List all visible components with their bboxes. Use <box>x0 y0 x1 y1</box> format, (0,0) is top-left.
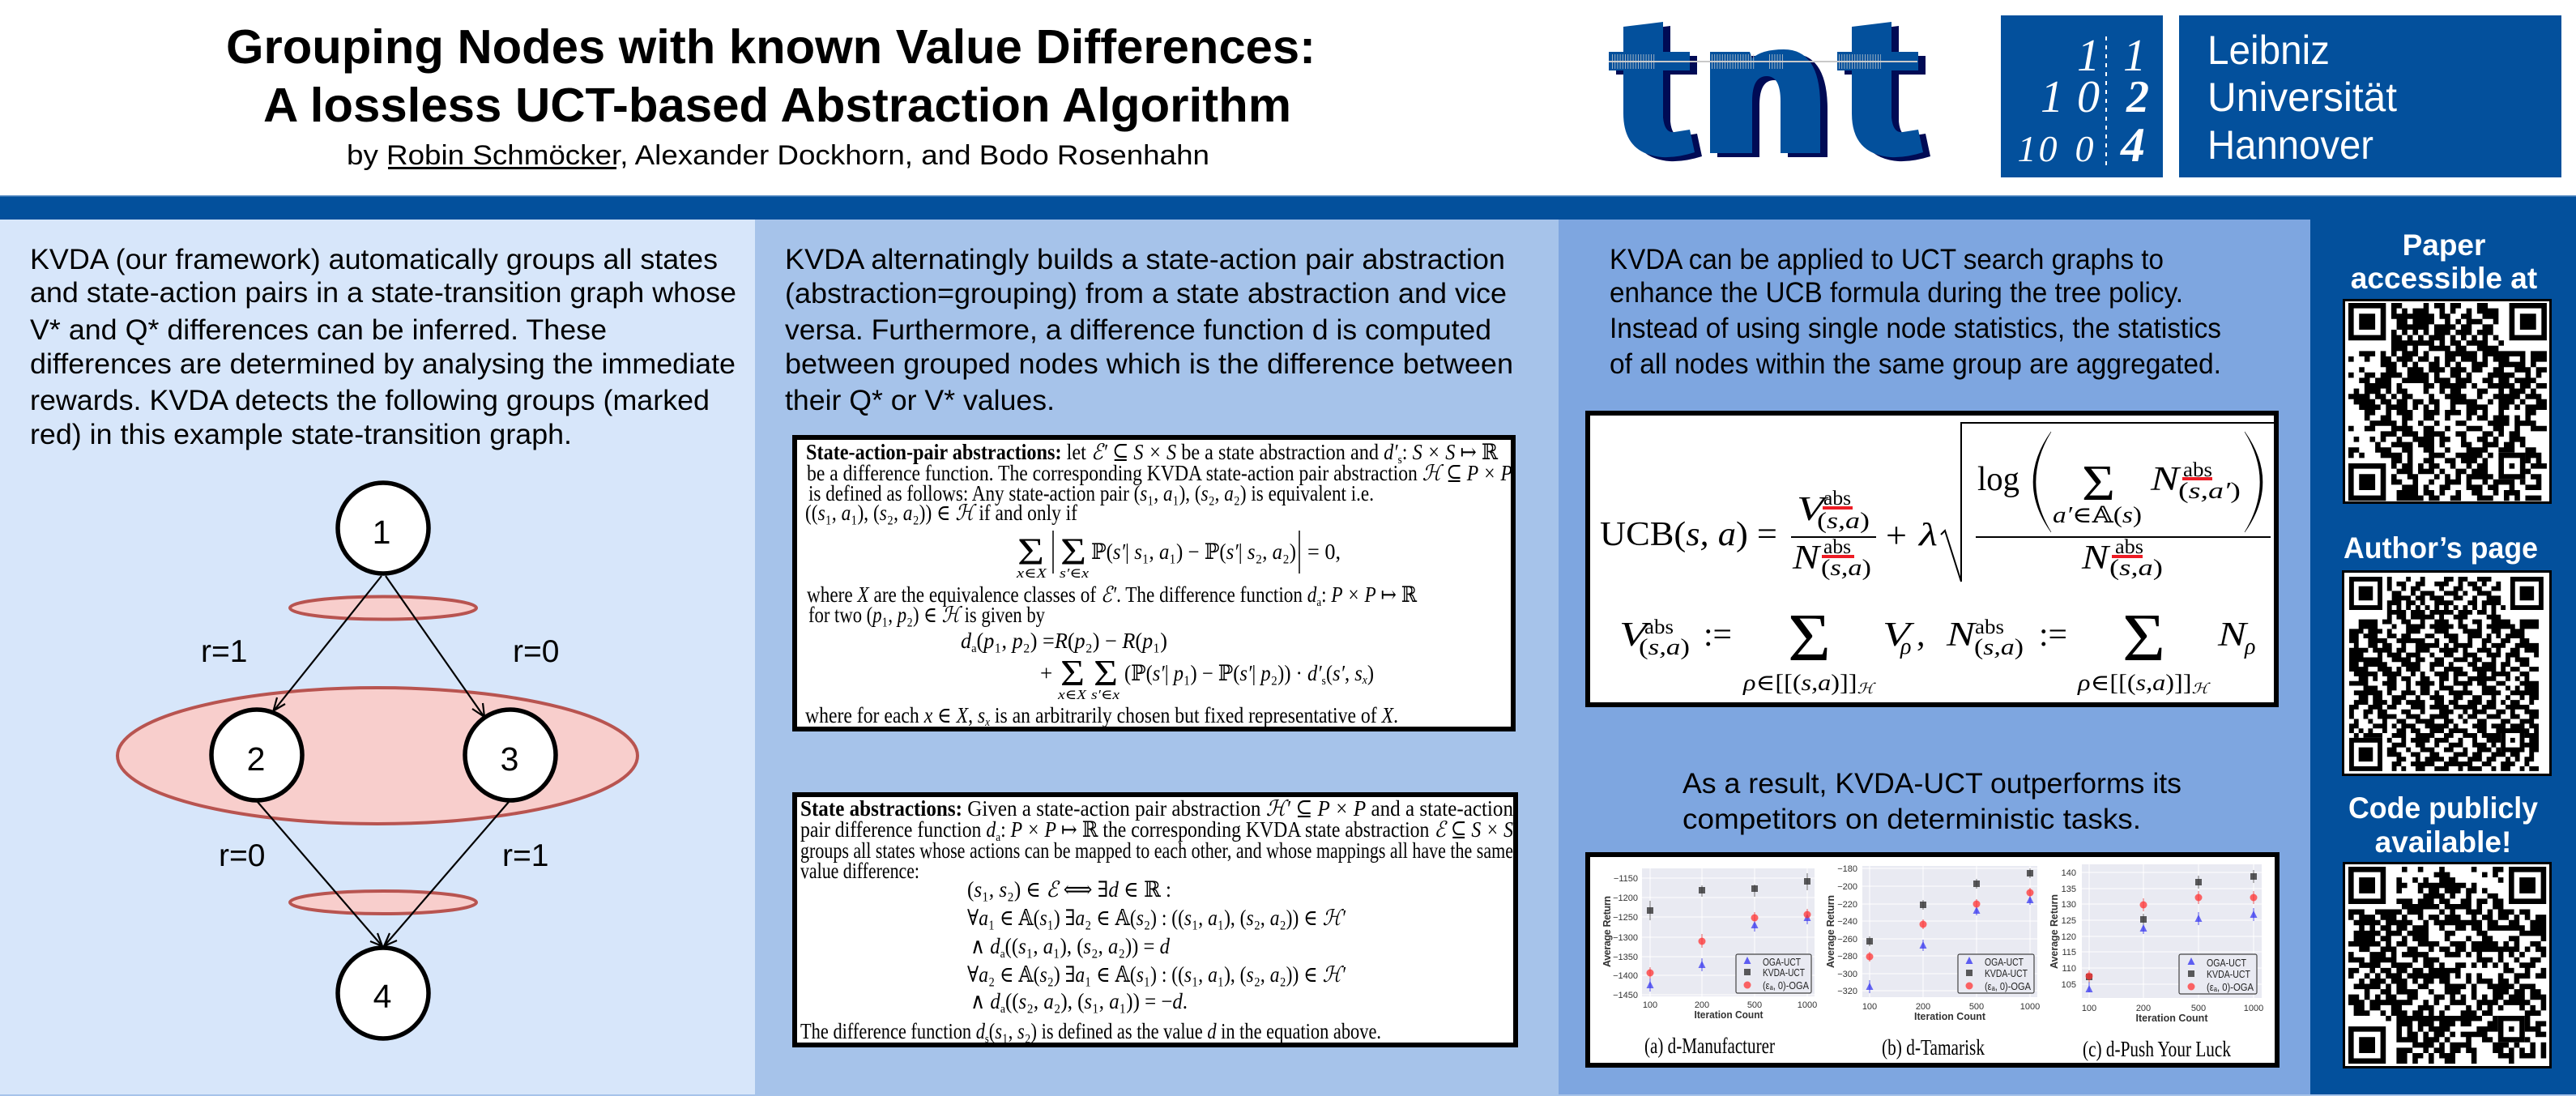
equation: difference function: (ℙ(s′| p₁) − ℙ(s′| p₂)) · d′ <box>1124 661 1323 685</box>
V abs definition: (s,a) <box>1639 634 1690 660</box>
QR code: author <box>2343 572 2550 774</box>
logo numerals: 4 <box>2120 118 2145 172</box>
edge labels: r=0 <box>219 838 265 873</box>
definition box: state abstractions: ( <box>989 1019 995 1043</box>
logo numerals: 0 <box>2077 72 2100 122</box>
chart: d-Manufacturer: 200 <box>1695 1000 1709 1010</box>
equation: difference function: ( <box>977 629 983 653</box>
denominator: abs <box>2115 536 2143 558</box>
square root <box>1941 423 2274 582</box>
chart: d-Tamarisk: Iteration Count <box>1914 1011 1986 1022</box>
UCB left side: UCB(s, a) = <box>1600 516 1777 553</box>
definition box: state abstractions: The difference function d <box>800 1019 1006 1043</box>
chart: d-Manufacturer: Iteration Count <box>1695 1009 1764 1021</box>
chart: d-Push Your Luck: 130 <box>2062 900 2076 910</box>
heading: code: Code publicly <box>2348 791 2538 825</box>
legend: OGA-UCT <box>1985 956 2024 968</box>
definition box: state abstractions: a <box>996 831 1000 844</box>
equation: equivalence condition: x∈X <box>1016 565 1047 581</box>
caption c: (c) d-Push Your Luck <box>2083 1037 2231 1061</box>
chart: d-Manufacturer: −1200 <box>1613 893 1638 903</box>
node labels: 4 <box>373 978 391 1015</box>
QR code: code <box>2344 864 2550 1068</box>
chart: d-Tamarisk: 1000 <box>2020 1002 2040 1012</box>
chart: d-Manufacturer: Average Return <box>1601 896 1613 967</box>
panel: KVDA intro and example graph <box>0 220 755 1094</box>
error bars and markers <box>1866 868 2033 993</box>
equation: difference function: Σ <box>1060 652 1085 693</box>
V abs definition: , <box>1917 616 1925 654</box>
definition box: state-action-pair abstractions: is an arbitrarily chosen but fixed representative of <box>990 703 1382 727</box>
definition box: state-action-pair abstractions: ((s₁, a₁), (s₂, a₂)) ∈ ℋ if and only if <box>805 501 1077 525</box>
chart: d-Push Your Luck: 110 <box>2062 964 2076 974</box>
V abs definition: ρ <box>1900 634 1911 659</box>
V abs definition: ρ∈[[( s,a)]] <box>1743 671 1853 696</box>
chart: d-Tamarisk: Average Return <box>1825 895 1836 968</box>
panel text <box>785 244 1513 416</box>
definition box: state-action-pair abstractions: S × S ↦ ℝ <box>1413 440 1503 464</box>
equation: state equivalence: (( <box>1005 934 1018 958</box>
results charts box <box>1588 855 2277 1065</box>
title <box>226 20 1316 132</box>
equation: equivalence condition <box>1016 531 1341 581</box>
equation: difference function: x∈X <box>1057 687 1087 702</box>
equation: difference function <box>961 629 1374 702</box>
definition box: state-action-pair abstractions <box>795 437 1513 729</box>
QR code: paper <box>2344 300 2550 502</box>
bottom edge stripe <box>0 1094 2576 1096</box>
chart: d-Push Your Luck: Iteration Count <box>2135 1013 2208 1024</box>
legend: OGA-UCT <box>2207 957 2246 969</box>
V abs definition: V <box>1619 616 1652 654</box>
chart: d-Tamarisk: −320 <box>1837 987 1857 996</box>
chart: d-Push Your Luck: 200 <box>2136 1004 2151 1013</box>
logo wordmark <box>2207 28 2397 168</box>
chart: d-Manufacturer: 1000 <box>1798 1000 1817 1010</box>
definition box: state abstractions: groups all states whose actions can be mapped to each other, and whose mappings all have the same <box>800 838 1513 863</box>
intro text: red) in this example state-transition graph. <box>30 419 572 450</box>
heading: code <box>2348 791 2538 859</box>
fraction V over N: N <box>1792 539 1821 577</box>
denominator <box>2081 536 2163 581</box>
error bars and markers <box>2085 870 2257 992</box>
intro text: KVDA (our framework) automatically groups all states <box>30 244 718 275</box>
denominator: N <box>2081 539 2110 577</box>
equation: difference function: s′∈x <box>1091 687 1120 702</box>
chart: d-Push Your Luck: Average Return <box>2049 894 2060 969</box>
chart: d-Push Your Luck <box>2049 864 2263 1061</box>
numerator log sum: abs <box>2183 459 2212 481</box>
chart: d-Tamarisk: −280 <box>1837 952 1857 962</box>
chart: d-Tamarisk: 100 <box>1862 1002 1877 1012</box>
chart: d-Manufacturer: 500 <box>1747 1000 1762 1010</box>
panel: links sidebar <box>2310 220 2576 1094</box>
result text: competitors on deterministic tasks. <box>1683 804 2141 835</box>
node labels: 3 <box>501 740 518 778</box>
panel text <box>1610 244 2221 380</box>
definition box: state-action-pair abstractions: where for each x ∈ X, s <box>805 703 986 727</box>
node labels: 2 <box>247 740 265 778</box>
title: A lossless UCT-based Abstraction Algorithm <box>263 79 1291 132</box>
equation: state equivalence <box>967 877 1346 1016</box>
definition box: state-action-pair abstractions: x <box>984 716 990 729</box>
intro text: differences are determined by analysing the immediate <box>30 348 736 380</box>
panel: UCT application and results <box>1559 220 2310 1094</box>
fraction V over N: abs <box>1823 488 1851 510</box>
error bars and markers <box>1646 873 1811 992</box>
authors: by Robin Schmöcker, Alexander Dockhorn, and Bodo Rosenhahn <box>347 140 1209 171</box>
chart: d-Manufacturer: −1300 <box>1613 933 1638 943</box>
equation: difference function: + <box>1040 661 1052 685</box>
logo wordmark: Hannover <box>2207 122 2373 168</box>
legend <box>2179 954 2257 994</box>
chart: d-Push Your Luck: 1000 <box>2244 1004 2263 1013</box>
equation: state equivalence: a <box>1000 1003 1005 1016</box>
equation: equivalence condition: ℙ(s′| s₁, a₁) − ℙ(s′| s₂, a₂) <box>1091 539 1296 564</box>
heading: code: available! <box>2375 825 2511 859</box>
chart: d-Tamarisk: −220 <box>1837 900 1857 910</box>
definition box: state abstractions: P × P ↦ ℝ the corresponding KVDA state abstraction ℰ ⊆ S × S <box>1011 817 1525 842</box>
logo wordmark: Leibniz <box>2207 28 2330 73</box>
fraction V over N: (s,a ) <box>1817 508 1870 534</box>
equation: difference function: s <box>1322 675 1326 688</box>
definition box: state-action-pair abstractions: State-action-pair abstractions: let ℰ′ ⊆ S × S be a state abstraction and d′ <box>806 440 1401 464</box>
formula box: UCB <box>1588 413 2276 705</box>
equation: state equivalence: ∀a₁ ∈ 𝔸(s₁) ∃a₂ ∈ 𝔸(s₂) : ((s₁, a₁), (s₂, a₂)) ∈ ℋ′ <box>967 906 1346 930</box>
V abs definition <box>1619 600 1925 697</box>
equation: state equivalence: (( <box>1005 989 1019 1013</box>
chart: d-Push Your Luck: 135 <box>2062 885 2076 894</box>
logo numerals: 1 <box>2017 128 2036 169</box>
heading: paper: Paper <box>2403 228 2485 262</box>
group ellipse top <box>290 596 476 619</box>
definition box: state-action-pair abstractions: is defined as follows: Any state-action pair (s₁, a₁), (s₂, a₂) is equivalent i.e. <box>808 481 1374 505</box>
legend: (εₐ, 0)-OGA <box>2207 981 2254 993</box>
definition box: state abstractions: s₁, s₂) is defined as the value d in the equation above. <box>995 1019 1415 1043</box>
definition box: state-action-pair abstractions: P × P ↦ ℝ <box>1331 582 1423 607</box>
legend: KVDA-UCT <box>1985 967 2028 979</box>
N abs definition <box>1946 600 2255 697</box>
equation: state equivalence: (s₁, s₂) ∈ ℰ ⟺ ∃d ∈ ℝ : <box>967 877 1171 902</box>
edge labels <box>201 634 559 873</box>
definition box: state-action-pair abstractions: be a difference function. The corresponding KVDA state-action pair abstraction ℋ ⊆ P × P <box>807 461 1512 485</box>
chart: d-Tamarisk: −180 <box>1837 864 1857 874</box>
equation: state equivalence: a <box>1000 948 1005 961</box>
chart: d-Tamarisk: −260 <box>1837 935 1857 945</box>
chart: d-Push Your Luck: 105 <box>2062 980 2076 990</box>
formula box: UCB: λ <box>1918 516 1938 552</box>
numerator log sum: a′∈𝔸( s) <box>2053 503 2142 528</box>
chart: d-Manufacturer <box>1601 868 1817 1058</box>
equation: state equivalence: s₂, a₂), (s₁, a₁)) = −d. <box>1019 989 1188 1013</box>
numerator log sum <box>1977 432 2263 532</box>
legend: KVDA-UCT <box>1763 966 1805 979</box>
N abs definition: N <box>1946 616 1977 654</box>
panel text: between grouped nodes which is the difference between <box>785 348 1513 380</box>
heading: paper: accessible at <box>2351 262 2537 295</box>
definition box: state abstractions: pair difference function d <box>800 817 1006 842</box>
V abs definition: V <box>1883 616 1915 654</box>
definition box: state-action-pair abstractions: : <box>1402 440 1413 464</box>
edge labels: r=1 <box>201 634 247 669</box>
group ellipse middle <box>117 688 638 824</box>
definition box: state abstractions: State abstractions: Given a state-action pair abstraction ℋ′ ⊆ P × P and a state-action <box>800 796 1513 821</box>
node labels <box>247 514 518 1015</box>
chart: d-Push Your Luck: 120 <box>2062 932 2076 942</box>
logo numerals: 0 <box>2038 128 2058 169</box>
equation: equivalence condition: = 0, <box>1307 539 1341 564</box>
intro text: V* and Q* differences can be inferred. These <box>30 314 607 346</box>
fraction V over N: abs <box>1823 536 1851 558</box>
legend: (εₐ, 0)-OGA <box>1763 979 1809 992</box>
equation: equivalence condition: Σ <box>1017 531 1044 574</box>
numerator log sum: Σ <box>2082 456 2115 511</box>
result text: As a result, KVDA-UCT outperforms its <box>1683 768 2181 800</box>
legend <box>1958 954 2034 993</box>
numerator log sum: log <box>1977 461 2019 498</box>
caption a: (a) d-Manufacturer <box>1644 1034 1775 1058</box>
numerator log sum: N <box>2150 461 2181 498</box>
logo numerals: 0 <box>2075 128 2093 169</box>
chart: d-Manufacturer: −1450 <box>1613 991 1638 1000</box>
fraction V over N: V <box>1797 491 1829 528</box>
logo wordmark: Universität <box>2207 75 2397 120</box>
chart: d-Push Your Luck: 140 <box>2062 868 2076 878</box>
legend: KVDA-UCT <box>2207 968 2250 980</box>
equation: difference function: ) <box>1367 661 1374 685</box>
chart: d-Manufacturer: −1350 <box>1613 953 1638 962</box>
chart: d-Tamarisk: 500 <box>1969 1002 1984 1012</box>
logo: tnt <box>1609 22 1930 161</box>
result text <box>1683 768 2181 835</box>
panel text: of all nodes within the same group are aggregated. <box>1610 348 2221 380</box>
formula box: UCB: + <box>1886 514 1907 556</box>
group ellipse bottom <box>290 891 476 914</box>
panel text: enhance the UCB formula during the tree policy. <box>1610 277 2183 309</box>
chart: d-Push Your Luck: 100 <box>2082 1004 2096 1013</box>
chart: d-Tamarisk: −200 <box>1837 882 1857 892</box>
definition box: state abstractions: : <box>1000 817 1011 842</box>
header bar <box>0 195 2576 220</box>
logo numerals: 1 <box>2041 72 2063 122</box>
chart: d-Manufacturer: −1400 <box>1613 971 1638 981</box>
title: Grouping Nodes with known Value Differences: <box>226 20 1316 74</box>
definition box: state-action-pair abstractions: : <box>1321 582 1331 607</box>
edge labels: r=1 <box>502 838 548 873</box>
definition box: state abstractions <box>795 795 1516 1046</box>
N abs definition: ρ∈[[( s,a)]] <box>2078 671 2188 696</box>
panel text: KVDA can be applied to UCT search graphs to <box>1610 244 2164 275</box>
chart: d-Tamarisk: 200 <box>1916 1002 1930 1012</box>
chart: d-Manufacturer: 100 <box>1643 1000 1657 1010</box>
equation: state equivalence: s₁, a₁), (s₂, a₂)) = d <box>1018 934 1171 958</box>
edge labels: r=0 <box>513 634 559 669</box>
legend <box>1736 954 1811 993</box>
logo: Leibniz Universität Hannover <box>2001 15 2561 177</box>
legend: OGA-UCT <box>1763 956 1801 968</box>
definition box: state-action-pair abstractions: where X are the equivalence classes of ℰ′. The difference function d <box>807 582 1333 607</box>
equation: difference function: p₁, p₂) =R(p₂) − R(p₁) <box>983 629 1168 653</box>
chart: d-Manufacturer: −1250 <box>1613 913 1638 923</box>
definition box: state-action-pair abstractions: a <box>1316 596 1321 609</box>
chart: d-Tamarisk: −240 <box>1837 917 1857 927</box>
arrows <box>258 576 509 946</box>
chart: d-Push Your Luck: 125 <box>2062 916 2076 926</box>
fraction V over N: (s,a) <box>1821 555 1871 581</box>
panel text: Instead of using single node statistics, the statistics <box>1610 313 2221 344</box>
chart: d-Manufacturer: −1150 <box>1614 874 1638 884</box>
definition box: state abstractions: value difference: <box>800 859 919 883</box>
state-transition graph <box>117 483 638 1038</box>
equation: state equivalence: ∧ d <box>970 934 1001 958</box>
chart: d-Push Your Luck: 500 <box>2191 1004 2206 1013</box>
fraction V over N <box>1791 488 1876 581</box>
equation: difference function: Σ <box>1094 652 1118 693</box>
N abs definition: (s,a) <box>1974 634 2024 660</box>
panel text: KVDA alternatingly builds a state-action pair abstraction <box>785 244 1505 275</box>
equation: state equivalence: ∧ d <box>970 989 1001 1013</box>
N abs definition: ρ <box>2244 634 2255 659</box>
heading: author: Author’s page <box>2344 531 2538 565</box>
panel text: their Q* or V* values. <box>785 385 1055 416</box>
equation: state equivalence: ∀a₂ ∈ 𝔸(s₂) ∃a₁ ∈ 𝔸(s₁) : ((s₁, a₁), (s₂, a₂)) ∈ ℋ′ <box>967 962 1346 987</box>
equation: difference function: x <box>1362 674 1367 687</box>
equation: difference function: a <box>971 642 977 655</box>
equation: difference function: s′, s <box>1333 661 1363 685</box>
N abs definition: := <box>2039 616 2067 654</box>
panel: abstraction definitions <box>755 220 1559 1094</box>
panel text: (abstraction=grouping) from a state abstraction and vice <box>785 278 1507 309</box>
chart: d-Push Your Luck: 115 <box>2062 948 2076 957</box>
V abs definition: := <box>1704 616 1732 654</box>
V abs definition: ℋ <box>1857 680 1877 697</box>
equation: equivalence condition: s′∈x <box>1060 565 1090 581</box>
header: title block <box>226 20 1316 171</box>
N abs definition: ℋ <box>2192 680 2211 697</box>
intro text <box>30 244 736 450</box>
N abs definition: Σ <box>2122 600 2165 676</box>
definition box: state-action-pair abstractions: X. <box>1382 703 1399 727</box>
N abs definition: N <box>2217 616 2248 654</box>
logo numerals: 2 <box>2126 72 2149 122</box>
nodes <box>211 483 556 1038</box>
denominator: (s,a ) <box>2109 555 2163 581</box>
logo numerals <box>2017 31 2149 172</box>
equation: equivalence condition: Σ <box>1060 531 1086 574</box>
chart: d-Tamarisk <box>1825 864 2040 1060</box>
intro text: rewards. KVDA detects the following groups (marked <box>30 385 710 416</box>
logo numerals: 1 <box>2077 31 2100 81</box>
definition box: state-action-pair abstractions: for two (p₁, p₂) ∈ ℋ is given by <box>808 603 1045 627</box>
definition box: state-action-pair abstractions: s <box>1398 454 1402 467</box>
heading: paper <box>2351 228 2537 295</box>
numerator log sum: (s,a′ ) <box>2178 478 2241 504</box>
chart: d-Tamarisk: −300 <box>1837 970 1857 979</box>
logo numerals: 1 <box>2123 31 2146 81</box>
legend: (εₐ, 0)-OGA <box>1985 980 2031 992</box>
equation: difference function: ( <box>1326 661 1333 685</box>
node labels: 1 <box>373 514 390 551</box>
panel text: versa. Furthermore, a difference function d is computed <box>785 314 1491 346</box>
N abs definition: abs <box>1975 616 2004 638</box>
caption b: (b) d-Tamarisk <box>1882 1035 1985 1060</box>
V abs definition: abs <box>1644 616 1674 638</box>
equation: difference function: d <box>961 629 972 653</box>
V abs definition: Σ <box>1788 600 1831 676</box>
intro text: and state-action pairs in a state-transition graph whose <box>30 277 736 309</box>
definition box: state abstractions: s <box>985 1033 989 1046</box>
